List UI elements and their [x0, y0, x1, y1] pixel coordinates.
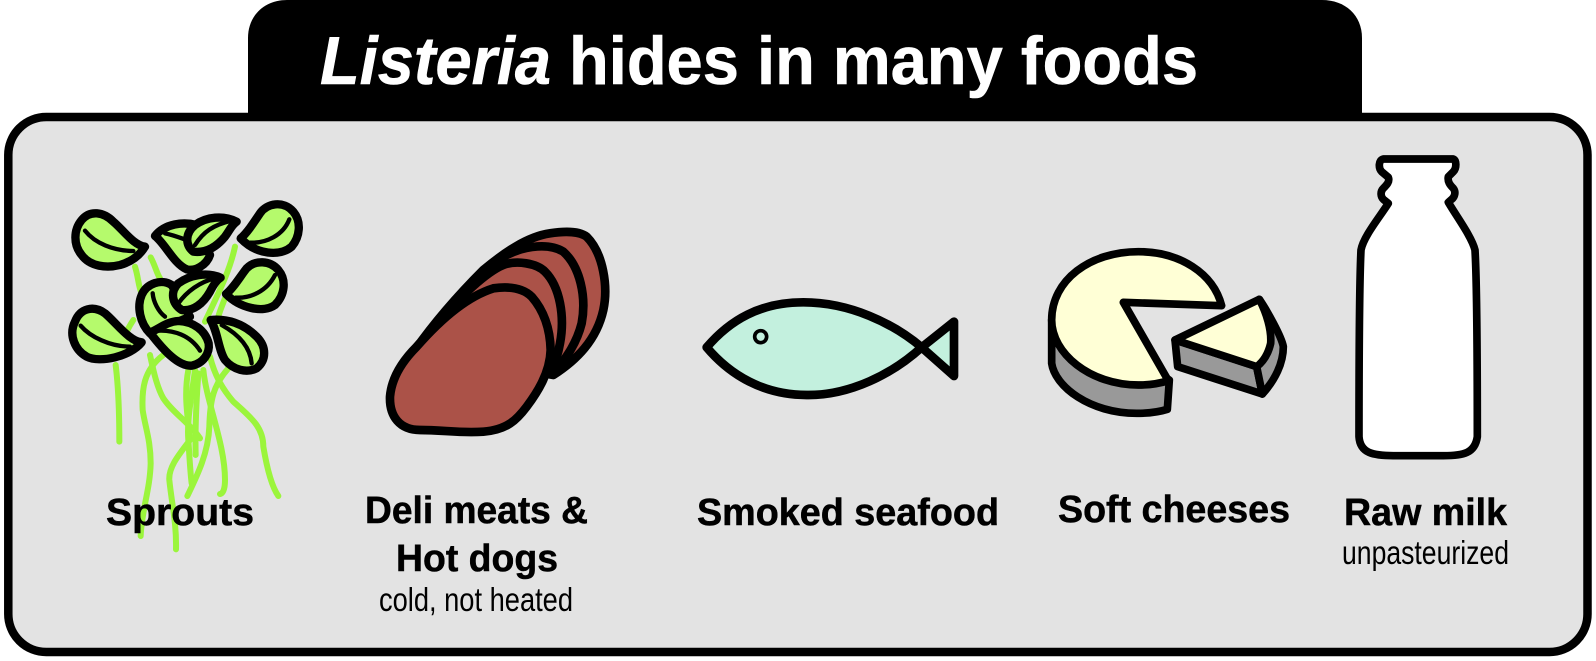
note: cold, not heated: cold, not heated	[379, 581, 573, 618]
label: raw milk: Raw milk	[1344, 492, 1508, 534]
food: smoked seafood	[697, 302, 999, 534]
title banner	[248, 0, 1362, 125]
icon: fish	[707, 302, 954, 395]
title banner: hides in many foods	[569, 23, 1198, 99]
food: deli meats and hot dogs	[365, 232, 605, 618]
note: unpasteurized: unpasteurized	[1342, 534, 1509, 571]
food: raw milk	[1342, 159, 1509, 571]
label: deli meats: Deli meats &	[365, 490, 588, 532]
icon: cheese wheel and wedge	[1052, 252, 1283, 413]
food: sprouts	[72, 204, 299, 549]
icon: sliced meat	[390, 232, 605, 432]
icon: milk bottle	[1359, 159, 1477, 456]
label: hot dogs: Hot dogs	[396, 538, 558, 580]
label: soft cheeses: Soft cheeses	[1058, 489, 1290, 531]
food: soft cheeses	[1052, 252, 1290, 531]
icon: sprouts	[72, 204, 299, 549]
label: smoked seafood: Smoked seafood	[697, 492, 999, 534]
title banner: Listeria	[320, 23, 551, 99]
label: sprouts: Sprouts	[106, 492, 254, 534]
